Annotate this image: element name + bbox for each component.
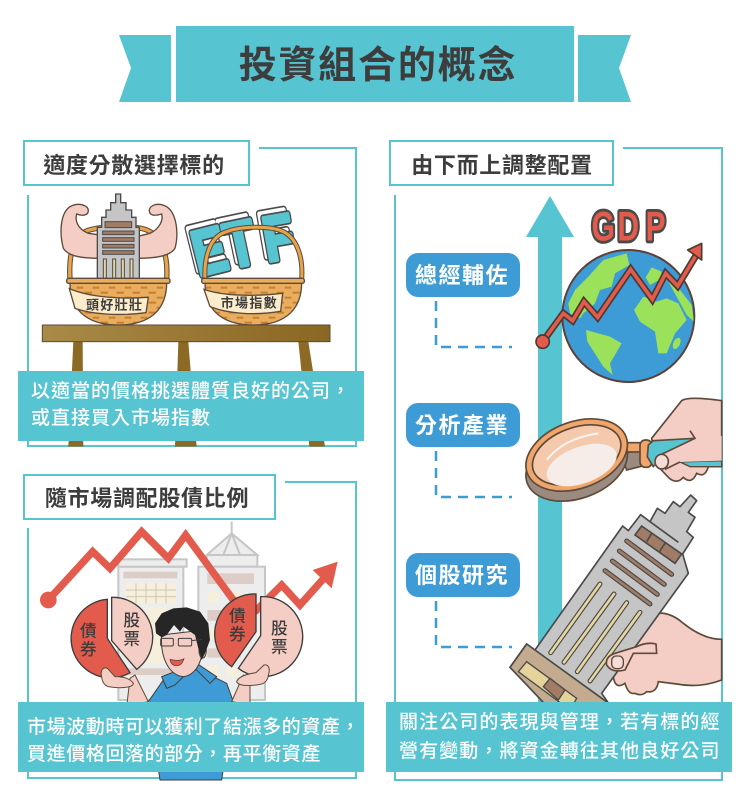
panel: choose targets [18,141,364,447]
caption text: 或直接買入市場指數 [31,407,211,429]
panel heading: 隨市場調配股債比例 [45,486,249,511]
title banner [119,26,631,102]
caption text: 買進價格回落的部分，再平衡資產 [27,743,321,765]
illustration: man balancing pies: 券 [229,625,246,644]
up arrow [526,196,574,710]
illustration: man balancing pies: 債 [80,622,97,641]
dashed connector: stock [436,601,512,647]
panel: top-down allocation [386,141,732,780]
basket: market index ETF: F [254,197,296,272]
caption band [18,371,364,441]
caption band [18,702,364,772]
magnifier [516,406,722,514]
skyscraper held by hand [510,495,722,720]
caption band [386,702,732,772]
thumb [654,431,722,469]
illustration: man balancing pies: 債 [229,607,246,626]
basket: strong company: 頭好壯壯 [86,297,143,312]
GDP globe illustration [536,203,702,382]
title plate [176,26,574,102]
panel heading box [390,141,613,185]
pill: macro [406,253,520,297]
illustration: man balancing pies [40,522,338,780]
panel frame [28,148,356,446]
basket: market index ETF: E [185,214,234,290]
table [42,325,330,447]
basket: market index ETF: T [214,203,259,278]
basket: market index ETF: F [258,202,300,276]
building [510,495,697,720]
globe [562,250,694,382]
illustration: man balancing pies: 券 [80,640,97,659]
hand [613,613,722,695]
basket: market index ETF: E [182,210,230,286]
dashed connector: macro [436,301,512,347]
basket: market index ETF: T [218,207,263,283]
hand [652,398,722,481]
basket: market index ETF: E [185,214,234,290]
panel heading box [24,475,275,519]
basket: market index ETF: T [218,207,263,283]
right pie chart [215,594,303,685]
GDP label: GDP [592,203,666,250]
pill: macro: 總經輔佐 [415,263,509,288]
caption text: 營有變動，將資金轉往其他良好公司 [399,740,721,762]
panel heading box [24,141,249,185]
illustration: man balancing pies: 股 [271,619,288,638]
panel frame [395,148,722,780]
caption text: 以適當的價格挑選體質良好的公司， [31,380,351,402]
title: 投資組合的概念 [239,45,517,87]
panel frame [28,482,356,778]
left ribbon [119,35,171,102]
pill: stock [406,553,520,597]
basket: market index ETF: E [182,210,230,286]
growth line arrow [536,243,702,348]
basket: market index ETF: 市場指數 [221,295,278,310]
panel heading: 由下而上調整配置 [411,153,593,178]
pill: industry: 分析產業 [415,413,509,438]
stock line chart arrow [40,532,338,610]
basket: market index ETF: T [214,203,259,278]
table illustration with baskets [42,194,330,447]
magnifier held by hand [516,398,722,514]
panel heading: 適度分散選擇標的 [43,153,225,178]
illustration: man balancing pies: 股 [123,611,140,630]
basket: strong company [61,194,177,325]
pill: stock: 個股研究 [415,563,509,588]
left pie chart [71,597,153,688]
right ribbon [578,35,631,102]
background buildings [118,522,265,700]
illustration: man balancing pies: 票 [271,637,288,656]
dashed connector: industry [436,451,512,497]
caption text: 關注公司的表現與管理，若有標的經 [399,711,721,733]
man [127,607,250,780]
basket: market index ETF [182,197,304,325]
basket: market index ETF: F [258,202,300,276]
illustration: man balancing pies: 票 [123,629,140,648]
panel: rebalance [18,475,364,780]
pill: industry [406,403,520,447]
basket: market index ETF: F [254,197,296,272]
thumb [606,643,657,671]
caption text: 市場波動時可以獲利了結漲多的資產， [27,716,360,738]
